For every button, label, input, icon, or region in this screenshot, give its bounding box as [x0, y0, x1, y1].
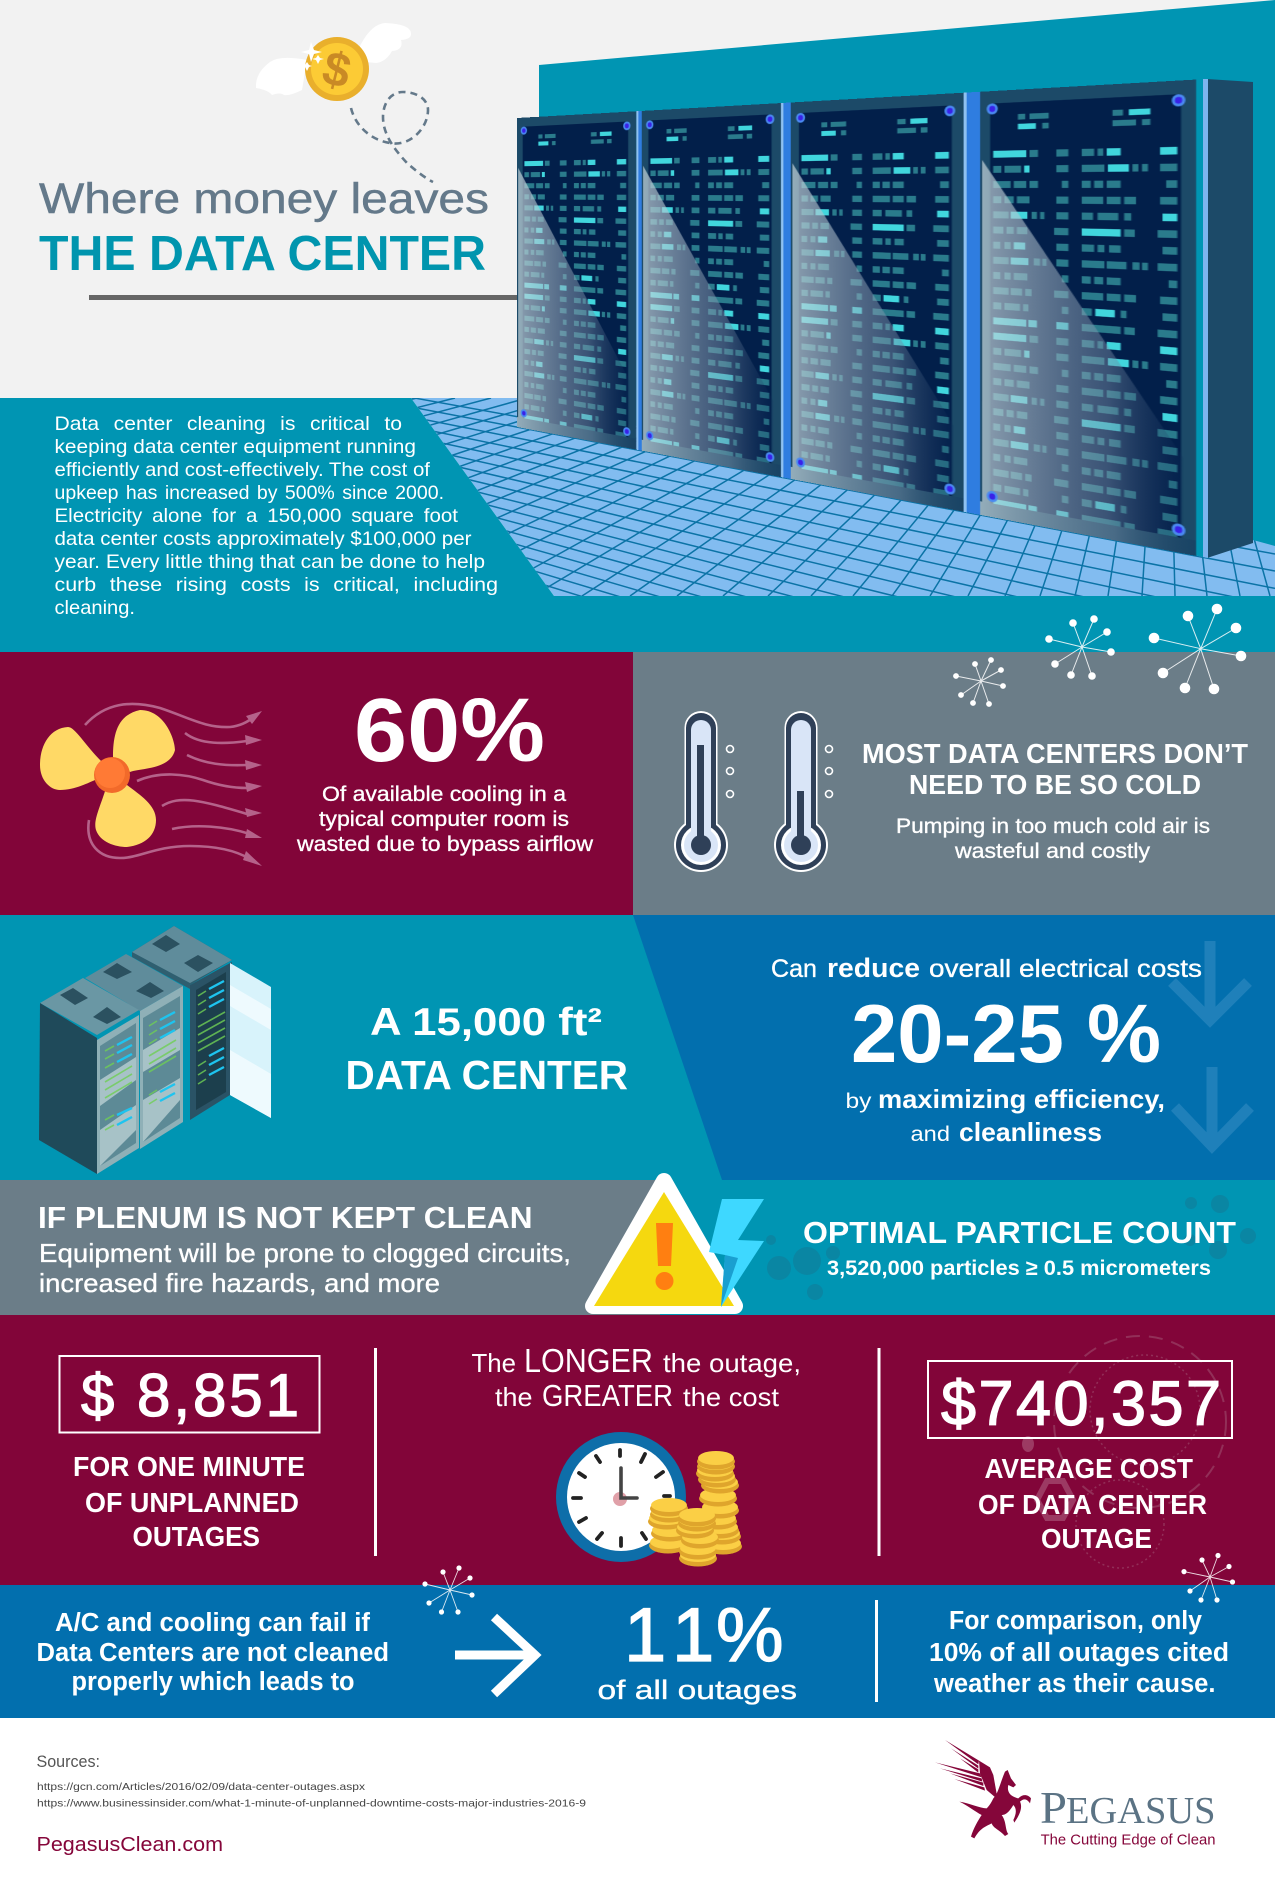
icon: starburst right: [1181, 1553, 1235, 1603]
text: comparison: 10% of all outages cited: [929, 1639, 1229, 1667]
logo tagline: The Cutting Edge of Clean: [1041, 1832, 1216, 1848]
text: can reduce: overall electrical costs: [929, 955, 1202, 983]
text: can reduce: Can: [771, 955, 817, 983]
tiled floor: [411, 398, 1275, 596]
logo wordmark: [1040, 1782, 1216, 1833]
text: comparison: For comparison, only: [949, 1607, 1203, 1635]
text: for one minute: FOR ONE MINUTE: [73, 1451, 305, 1482]
panel: optimal particle count: [660, 1180, 1275, 1315]
text: wasteful cold air: wasteful and costly: [954, 840, 1151, 863]
icon: fan with airflow: [40, 704, 262, 866]
icon: coin stacks: [648, 1451, 742, 1566]
heading: most data centers: NEED TO BE SO COLD: [909, 769, 1201, 800]
icon: snow starbursts top right: [953, 604, 1246, 707]
arrow: [455, 1617, 535, 1694]
text: longer greater: the outage,: [663, 1348, 801, 1378]
title: THE DATA CENTER: [39, 227, 486, 281]
footer sources: Sources:: [36, 1752, 100, 1771]
footer sources: [36, 1752, 586, 1810]
heading: most data centers: MOST DATA CENTERS DON’T: [862, 738, 1248, 769]
icon: flying coin with wings: [256, 23, 411, 101]
dashed flight path: [351, 92, 433, 182]
decorative particles: [766, 1195, 1256, 1300]
intro paragraph: year. Every little thing that can be done to help: [54, 551, 485, 573]
stat: 60%: 60%: [354, 681, 545, 781]
footer sources: https://gcn.com/Articles/2016/02/09/data-center-outages.aspx: [37, 1781, 366, 1793]
icon: starburst left: [422, 1565, 475, 1615]
heading: a 15,000 ft2 data center: [346, 1001, 628, 1098]
icon: thermometer high: [674, 711, 734, 872]
text: average cost: AVERAGE COST: [984, 1453, 1193, 1484]
text: cooling wasted: Of available cooling in a: [322, 782, 566, 806]
text: ac and cooling: A/C and cooling can fail if: [55, 1609, 371, 1637]
intro paragraph: keeping data center equipment running: [54, 436, 416, 458]
icon: flying coin with wings: $: [317, 42, 356, 99]
footer sources: https://www.businessinsider.com/what-1-minute-of-unplanned-downtime-costs-major-industries-2016-9: [37, 1798, 586, 1810]
icon: warning triangle: [593, 1181, 735, 1306]
divider: [875, 1600, 878, 1702]
stat box: $740,357: $740,357: [941, 1369, 1221, 1439]
text: by maximizing efficiency: maximizing efficiency,: [878, 1084, 1165, 1114]
text: for one minute: OUTAGES: [132, 1521, 260, 1552]
text: average cost: OUTAGE: [1041, 1523, 1152, 1554]
text: comparison: weather as their cause.: [933, 1670, 1216, 1698]
text: for one minute: OF UNPLANNED: [85, 1487, 299, 1518]
title underline: [89, 295, 517, 300]
text: by maximizing efficiency: and: [910, 1123, 950, 1146]
panel: bypass airflow: [0, 652, 633, 916]
text: cooling wasted: wasted due to bypass airflow: [296, 832, 593, 856]
stat: 11%: 11%: [624, 1593, 784, 1678]
title: Where money leaves: [39, 175, 489, 223]
stat box: $8,851: $ 8,851: [81, 1362, 299, 1429]
panel: too cold: [633, 652, 1275, 916]
text: by maximizing efficiency: cleanliness: [959, 1117, 1102, 1147]
intro paragraph: Electricity alone for a 150,000 square foot: [54, 505, 459, 527]
intro paragraph: data center costs approximately $100,000 per: [54, 528, 472, 550]
panel: outage costs: [0, 1315, 1275, 1586]
text: plenum consequences: [39, 1238, 571, 1298]
intro paragraph: Data center cleaning is critical to: [54, 413, 402, 435]
text: by maximizing efficiency: by: [846, 1090, 872, 1113]
decorative gears: [1022, 1336, 1226, 1568]
text: longer greater: the cost: [683, 1382, 780, 1412]
heading: a 15,000 ft2 data center: DATA CENTER: [346, 1052, 628, 1098]
text: plenum consequences: Equipment will be prone to clogged circuits,: [39, 1238, 571, 1268]
icon: lightning bolt: [709, 1199, 764, 1307]
panel: cooling outages: [0, 1585, 1275, 1718]
text: ac and cooling: Data Centers are not cleaned: [36, 1639, 389, 1667]
panel: reduce electrical costs: [633, 915, 1275, 1180]
intro paragraph: [54, 413, 498, 619]
divider: [374, 1348, 377, 1556]
text: longer greater: [472, 1342, 801, 1413]
text: longer greater: LONGER: [524, 1342, 653, 1379]
header background: [0, 0, 1275, 400]
text: can reduce: [771, 953, 1202, 983]
text: average cost: OF DATA CENTER: [978, 1489, 1207, 1520]
intro paragraph: curb these rising costs is critical, including: [54, 574, 498, 596]
logo wordmark: EGASUS: [1066, 1790, 1216, 1832]
text: by maximizing efficiency: [846, 1084, 1165, 1147]
title: [39, 175, 489, 281]
text: longer greater: GREATER: [542, 1378, 673, 1413]
text: for one minute: [73, 1451, 305, 1552]
logo wordmark: P: [1040, 1782, 1067, 1833]
text: longer greater: The: [472, 1348, 516, 1378]
text: of all outages: of all outages: [598, 1675, 797, 1705]
divider: [878, 1348, 880, 1556]
text: comparison: [929, 1607, 1229, 1698]
intro paragraph: cleaning.: [54, 597, 135, 619]
icon: clock: [556, 1432, 686, 1562]
back wall: [539, 0, 1275, 560]
rack side panel: [1203, 79, 1253, 558]
heading: most data centers: [862, 738, 1248, 800]
stat: 20-25%: 20-25 %: [851, 987, 1161, 1080]
icon: server racks: [39, 926, 271, 1174]
text: longer greater: the: [495, 1382, 532, 1412]
intro panel background: [0, 398, 1275, 653]
icon: thermometer low: [774, 711, 832, 872]
website link: PegasusClean.com: [36, 1834, 223, 1856]
text: ac and cooling: properly which leads to: [72, 1668, 354, 1696]
intro paragraph: efficiently and cost-effectively. The cost of: [54, 459, 431, 481]
text: cooling wasted: [296, 782, 593, 856]
text: ac and cooling: [36, 1609, 389, 1696]
text: particle count value: 3,520,000 particles ≥ 0.5 micrometers: [827, 1256, 1211, 1280]
icon: winged horse: [935, 1740, 1031, 1838]
panel: plenum warning: [0, 1180, 660, 1315]
text: cooling wasted: typical computer room is: [319, 807, 569, 831]
heading: if plenum: IF PLENUM IS NOT KEPT CLEAN: [38, 1200, 532, 1235]
heading: a 15,000 ft2 data center: A 15,000 ft²: [370, 1001, 602, 1044]
text: average cost: [978, 1453, 1207, 1554]
text: wasteful cold air: [896, 815, 1210, 863]
panel: 15,000 sq ft data center: [0, 915, 760, 1180]
icon: down arrows: [1172, 941, 1250, 1146]
logo: pegasus: [935, 1740, 1216, 1848]
text: wasteful cold air: Pumping in too much cold air is: [896, 815, 1210, 838]
text: can reduce: reduce: [827, 953, 920, 983]
heading: optimal particle count: OPTIMAL PARTICLE COUNT: [803, 1215, 1236, 1250]
server rack wall: [517, 80, 1196, 556]
text: plenum consequences: increased fire hazards, and more: [39, 1268, 440, 1298]
intro paragraph: upkeep has increased by 500% since 2000.: [54, 482, 444, 504]
